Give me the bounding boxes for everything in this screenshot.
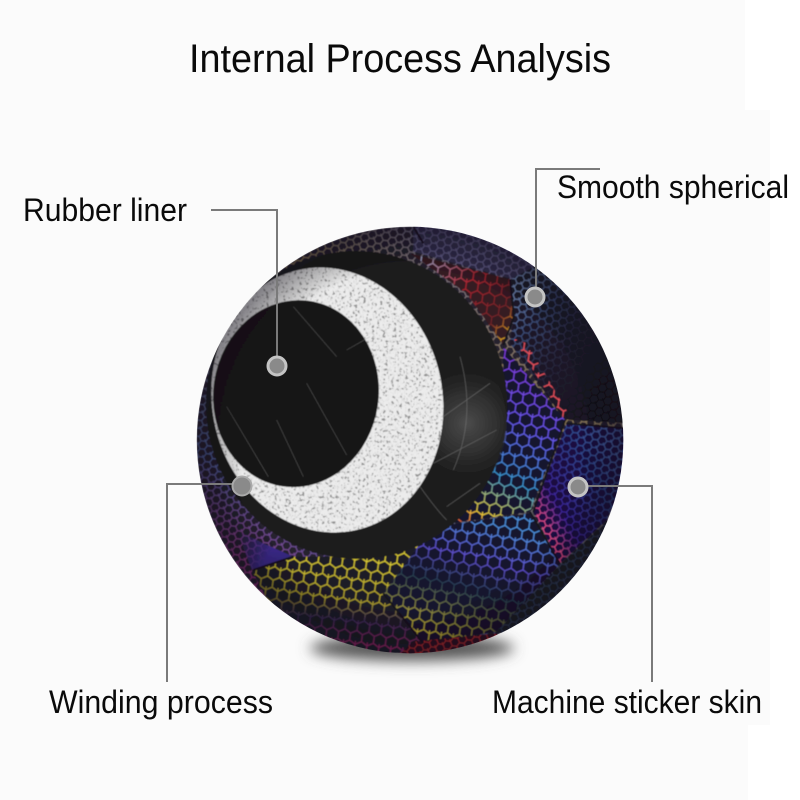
black outer layer cut	[206, 250, 508, 560]
label: smooth spherical: Smooth spherical	[557, 169, 789, 205]
skin panel: bottom left yellow	[252, 543, 423, 657]
rubber seam lines	[420, 357, 497, 520]
spherical shading	[197, 227, 623, 653]
label: winding process: Winding process	[49, 684, 273, 720]
leader line: winding process	[167, 484, 242, 682]
leader line: machine sticker skin	[578, 486, 652, 682]
skin panel: top red	[410, 253, 513, 345]
marker: smooth spherical	[526, 288, 544, 306]
skin panel: upper right navy	[510, 260, 630, 423]
skin panel: right violet	[533, 423, 627, 563]
label: machine sticker skin: Machine sticker skin	[492, 684, 762, 720]
leader line: rubber liner	[211, 210, 277, 366]
skin panel: bottom centre	[383, 513, 560, 643]
rubber liner (black inner sphere)	[212, 300, 380, 488]
skin panel: lower right rim	[498, 520, 608, 634]
panel seams	[253, 227, 627, 643]
marker: rubber liner	[268, 357, 286, 375]
marker: machine sticker skin	[569, 478, 587, 496]
soccer ball cutaway	[186, 223, 630, 657]
leader line: smooth spherical	[536, 169, 600, 297]
skin panel: centre purple	[447, 347, 565, 524]
ground shadow	[310, 635, 514, 661]
ball base and outer rim hexagons	[197, 223, 623, 653]
skin panel: lower left violet wedge	[242, 536, 292, 570]
winding layer (white fibre crescent)	[210, 266, 444, 534]
marker: winding process	[232, 476, 252, 496]
title: Internal Process Analysis	[189, 37, 611, 81]
skin panel: bottom seam red	[400, 633, 498, 654]
label: rubber liner: Rubber liner	[23, 192, 187, 228]
